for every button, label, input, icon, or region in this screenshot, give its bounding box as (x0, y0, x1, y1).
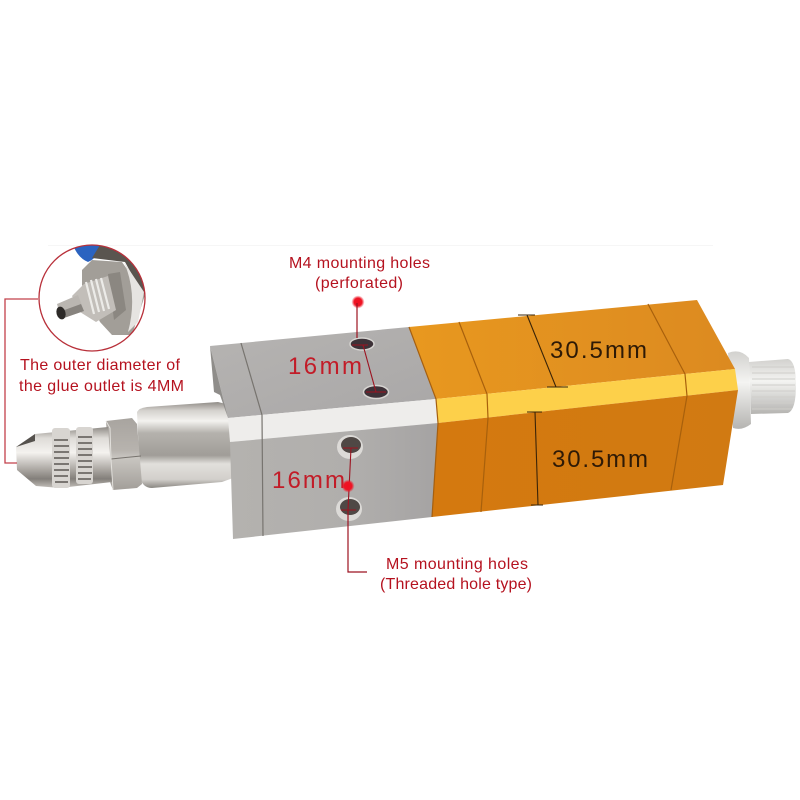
silver block (210, 327, 438, 539)
inlet cylinder (137, 402, 233, 488)
mounting holes (336, 338, 388, 521)
callout: M4 mounting holes: M4 mounting holes (289, 255, 430, 272)
orange block (409, 300, 738, 517)
dimension: front height 30.5mm (527, 412, 648, 505)
callout: glue outlet diameter: The outer diameter of (20, 357, 181, 374)
dimension: M5 spacing 16mm: 16mm (272, 467, 345, 494)
dimension: M4 spacing 16mm (288, 345, 386, 392)
nozzle (16, 427, 112, 488)
callout: glue outlet diameter: the glue outlet is 4MM (19, 378, 184, 395)
callout: M5 mounting holes: M5 mounting holes (386, 556, 528, 573)
infographic: glue valve dimensions (4, 244, 796, 592)
dimension: top width 30.5mm (518, 315, 647, 387)
dimension: M4 spacing 16mm: 16mm (288, 353, 362, 380)
faint top rule (48, 245, 713, 246)
callout: glue outlet diameter (19, 357, 184, 395)
hex nut (106, 418, 142, 490)
callout: M4 mounting holes (289, 255, 430, 338)
dimension: top width 30.5mm: 30.5mm (550, 337, 647, 364)
callout: M5 mounting holes: (Threaded hole type) (380, 576, 532, 593)
callout: M4 mounting holes: (perforated) (315, 275, 403, 292)
knob at rear (728, 351, 796, 429)
dimension: front height 30.5mm: 30.5mm (552, 446, 648, 473)
callout line: outlet to nozzle (5, 299, 38, 463)
inset: glue outlet detail (39, 245, 146, 351)
callout: M5 mounting holes (342, 480, 532, 593)
valve body (16, 300, 796, 539)
dimension: M5 spacing 16mm (272, 448, 358, 510)
